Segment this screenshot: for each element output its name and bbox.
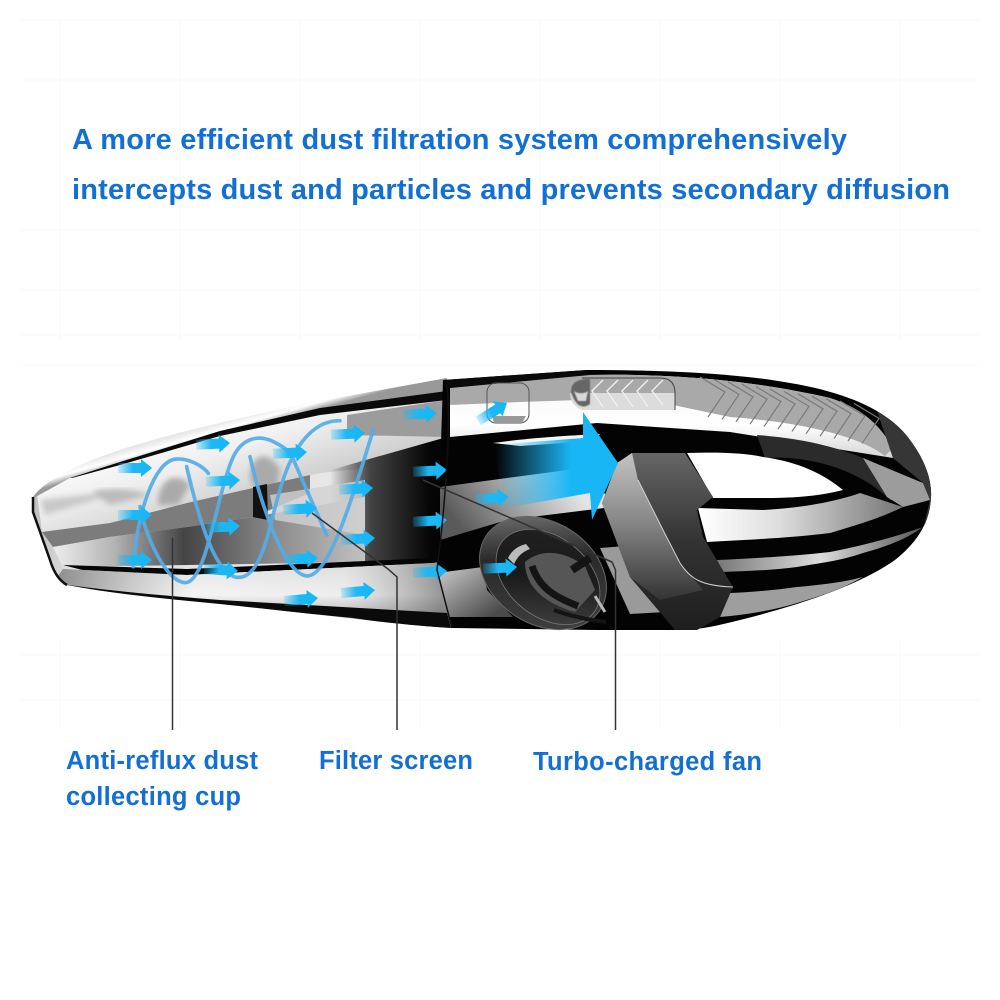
- title: [72, 124, 950, 206]
- right dark sweep and cap: [757, 435, 892, 500]
- airflow arrows: [118, 395, 517, 610]
- slider window: [570, 378, 675, 410]
- section divider: [437, 385, 452, 628]
- top band with grip: [450, 375, 893, 458]
- rotating hook clip: [602, 453, 733, 630]
- large airflow arrow: [493, 412, 618, 520]
- leader line: turbo fan: [423, 480, 616, 730]
- label: anti-reflux dust collecting cup: Anti-reflux dust: [66, 747, 258, 775]
- airflow spiral: [133, 421, 373, 583]
- title: intercepts dust and particles and prevents secondary diffusion: [72, 174, 950, 206]
- leader line: filter screen: [312, 513, 397, 730]
- handle body: [430, 365, 945, 635]
- label: filter screen: Filter screen: [319, 747, 473, 775]
- vacuum cleaner illustration: [32, 370, 932, 630]
- grip ridges: [700, 377, 879, 443]
- nose: transparent dust cup: [30, 370, 455, 635]
- label: anti-reflux dust collecting cup: collecting cup: [66, 783, 241, 811]
- title: A more efficient dust filtration system comprehensively: [72, 124, 847, 156]
- label: turbo-charged fan: Turbo-charged fan: [533, 748, 762, 776]
- leader line: dust cup: [172, 538, 174, 730]
- turbo fan: [458, 493, 628, 653]
- hole and stripes: [687, 453, 843, 498]
- slide button: [487, 383, 529, 423]
- lower left wedges: [440, 467, 612, 540]
- label: anti-reflux dust collecting cup: [66, 747, 258, 811]
